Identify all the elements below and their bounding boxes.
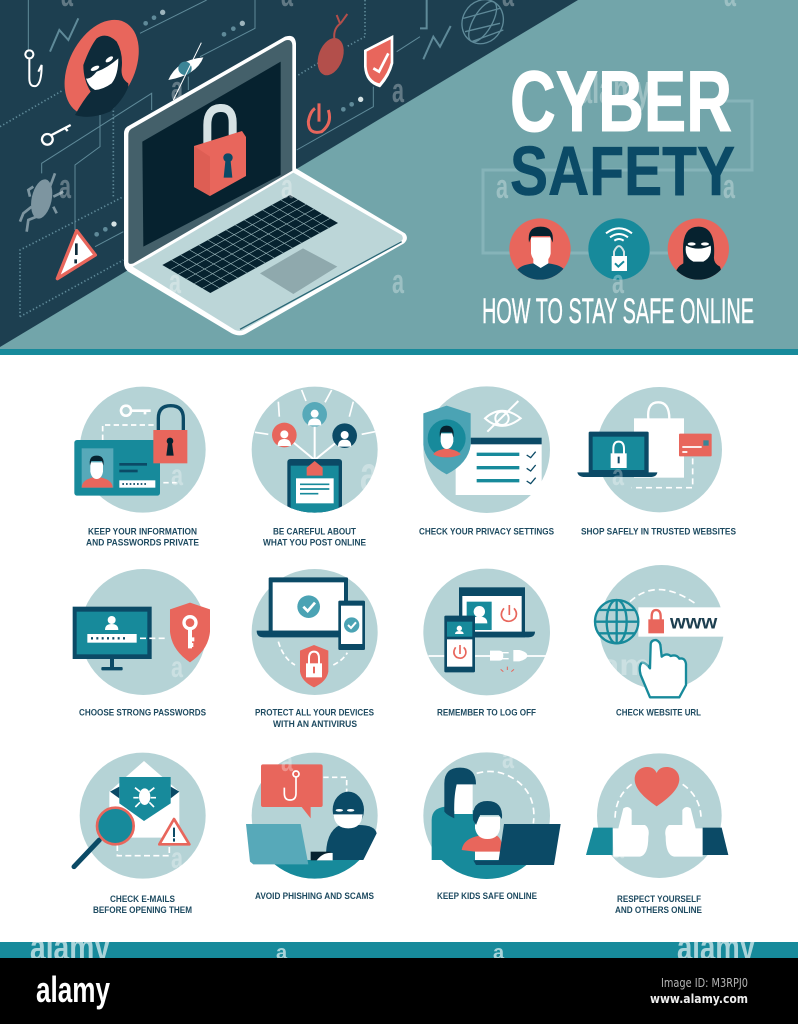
watermarks over tips: a — [612, 459, 624, 492]
label: AVOID PHISHING AND SCAMS — [255, 891, 374, 901]
icon: key — [42, 125, 71, 145]
icon: shield — [364, 35, 393, 87]
icon: heart and thumbs up — [586, 753, 728, 878]
label: CHECK WEBSITE URL — [616, 708, 701, 718]
label: PROTECT ALL YOUR DEVICES — [255, 708, 374, 718]
watermarks in hero: a — [171, 70, 184, 108]
icon: monitor and key shield — [73, 569, 210, 695]
tip: respect others — [586, 753, 728, 915]
icon: shared post — [252, 387, 378, 516]
icon trio — [509, 218, 729, 287]
label: CHECK YOUR PRIVACY SETTINGS — [419, 526, 554, 536]
label line 2: WITH AN ANTIVIRUS — [273, 719, 357, 729]
icon: crossed eye — [168, 43, 203, 100]
icon: hacker badge — [50, 7, 154, 127]
tip: privacy settings — [419, 386, 554, 536]
watermarks in hero: a — [496, 168, 509, 206]
faint alamy watermark behind title: alamy — [578, 68, 650, 112]
icon: globe, url bar and hand — [595, 565, 726, 697]
tip: kids safe — [423, 752, 561, 901]
icon: devices with antivirus — [252, 569, 378, 695]
icon: shield and checklist — [423, 386, 550, 513]
icon: hook bubble and hacker — [246, 753, 378, 880]
watermarks over tips: a — [360, 448, 378, 501]
label: CHECK E-MAILS — [110, 894, 175, 904]
watermarks over tips — [171, 448, 650, 875]
watermarks in hero: a — [612, 263, 625, 301]
bottom teal band — [0, 942, 798, 958]
icon: bomb — [313, 14, 349, 79]
watermarks in hero: a — [281, 168, 294, 206]
alamy logo: alamy — [36, 969, 110, 1010]
icon: parent and child at laptop — [423, 752, 561, 880]
image ID: Image ID: M3RPJ0 — [661, 976, 748, 990]
label line 2: AND PASSWORDS PRIVATE — [86, 538, 199, 548]
tip: phishing — [246, 753, 378, 901]
icon: faded globe and graph — [420, 0, 511, 59]
watermarks over tips: a — [502, 742, 514, 775]
faint circuit frame behind title — [483, 101, 752, 253]
label: SHOP SAFELY IN TRUSTED WEBSITES — [581, 526, 736, 536]
icon: warning triangle — [57, 231, 95, 279]
tip: keep information private — [74, 387, 206, 548]
keyboard — [162, 195, 338, 293]
icon: devices and unplugged cord — [423, 569, 550, 695]
footer bar — [0, 958, 798, 1024]
circuit network icons — [0, 0, 420, 317]
watermarks in hero: a — [392, 72, 405, 110]
label: BE CAREFUL ABOUT — [273, 526, 356, 536]
watermarks over tips: a — [612, 832, 624, 865]
bottom teal band: alamy — [677, 927, 755, 969]
title: SAFETY: SAFETY — [510, 132, 735, 210]
watermarks in hero: a — [723, 168, 736, 206]
watermarks over tips: a — [171, 842, 183, 875]
icon: ID card and padlock — [74, 387, 206, 513]
watermarks in hero: a — [59, 168, 72, 206]
touchpad — [260, 248, 337, 294]
label: REMEMBER TO LOG OFF — [437, 708, 536, 718]
watermarks over tips: a — [171, 459, 183, 492]
label line 2: WHAT YOU POST ONLINE — [263, 538, 366, 548]
tip: protect devices — [252, 569, 378, 729]
padlock — [194, 108, 246, 196]
tip: strong passwords — [73, 569, 210, 718]
watermarks over tips: am — [600, 649, 650, 682]
watermarks over tips: a — [171, 651, 183, 684]
bottom teal band: alamy — [30, 927, 110, 969]
label line 2: BEFORE OPENING THEM — [93, 905, 192, 915]
tip: log off — [423, 569, 550, 718]
watermarks in hero: a — [392, 263, 405, 301]
icon: user avatar — [509, 218, 571, 287]
icon: wifi padlock — [588, 218, 650, 280]
label: KEEP YOUR INFORMATION — [88, 526, 197, 536]
tip: check emails — [74, 753, 206, 915]
icon: hacker avatar — [668, 218, 729, 280]
icon: bug — [20, 173, 63, 232]
icon: power — [308, 103, 330, 132]
bottom teal band: a — [276, 942, 288, 964]
tip: shop safely — [577, 387, 736, 536]
website: www.alamy.com — [650, 991, 748, 1006]
panel: hero header — [0, 0, 798, 355]
icon: laptop, bag and card — [577, 387, 722, 512]
label: RESPECT YOURSELF — [617, 894, 701, 904]
icon: globe, url bar and hand: www — [669, 612, 718, 633]
watermarks in hero: a — [169, 263, 182, 301]
tip: careful posting — [252, 387, 378, 548]
bottom teal band: a — [493, 942, 505, 964]
watermarks in hero — [59, 0, 737, 301]
icon: fish hook — [25, 50, 42, 86]
label: CHOOSE STRONG PASSWORDS — [79, 708, 206, 718]
label line 2: AND OTHERS ONLINE — [615, 905, 702, 915]
icon: envelope, magnifier, warning — [74, 753, 206, 879]
laptop with padlock — [124, 36, 407, 335]
watermarks over tips: a — [281, 745, 293, 778]
tip: check URL — [595, 565, 726, 718]
label: KEEP KIDS SAFE ONLINE — [437, 891, 537, 901]
